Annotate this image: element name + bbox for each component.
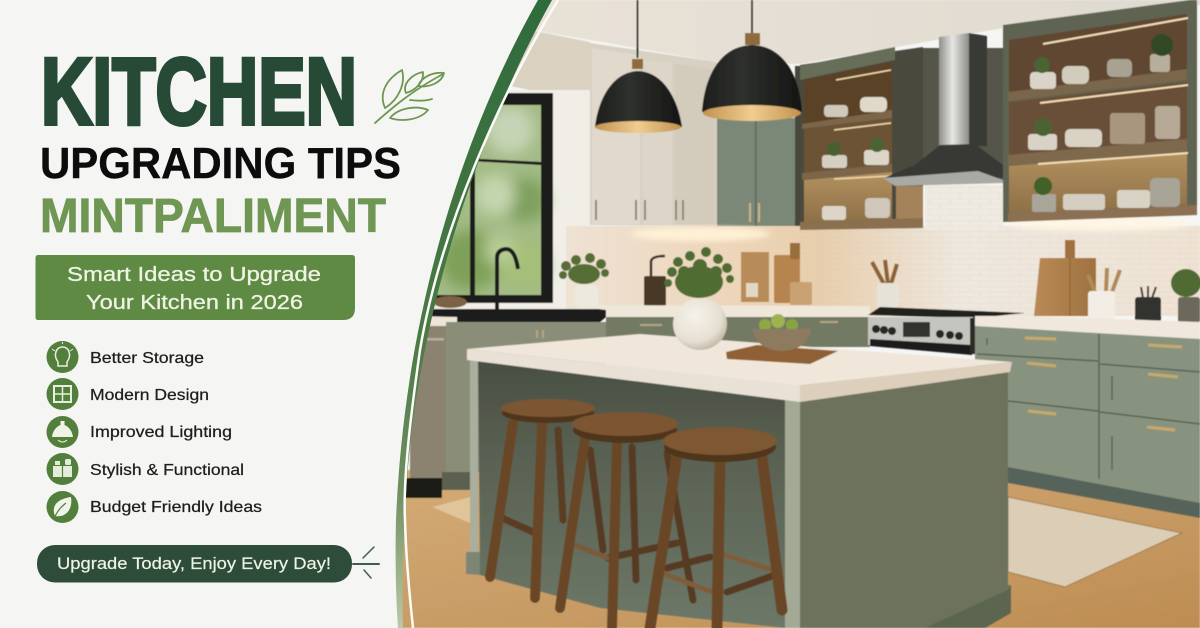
window glass foliage — [420, 100, 549, 300]
open shelves right — [1003, 0, 1197, 222]
green upper cabinets — [717, 66, 803, 229]
wooden boards and rack — [741, 243, 812, 305]
counter accessories — [559, 240, 1200, 323]
banner line 1: Smart Ideas to Upgrade — [67, 264, 321, 286]
kitchen photo scene — [400, 0, 1200, 628]
shelf objects — [1028, 34, 1180, 212]
fruit bowl — [753, 314, 811, 351]
icon: burst lines — [353, 547, 379, 578]
utensil crock — [872, 260, 899, 309]
curved white line — [405, 0, 558, 628]
plant foliage — [664, 247, 734, 298]
right countertop — [975, 316, 1200, 339]
item: modern design — [46, 378, 209, 410]
title: Kitchen: KITCHEN — [41, 39, 357, 145]
corner plant — [1171, 269, 1200, 323]
item: budget friendly ideas: Budget Friendly Ideas — [90, 499, 262, 516]
call to action pill — [37, 545, 352, 582]
tall cream cabinets — [590, 43, 717, 226]
curved green band — [396, 0, 552, 628]
lower cabinets left — [402, 317, 870, 498]
item: budget friendly ideas — [46, 491, 262, 523]
range hood — [883, 33, 1003, 186]
open shelves left — [800, 47, 923, 230]
window wall and reveal — [400, 90, 590, 315]
window — [420, 93, 553, 303]
island decor — [664, 247, 838, 364]
lower cabinets right — [975, 326, 1200, 518]
faucet and sink — [415, 249, 606, 327]
item: improved lighting — [46, 416, 232, 448]
wooden tray — [726, 345, 838, 364]
window frame — [430, 93, 553, 303]
feature list — [46, 341, 262, 523]
icon: leaf sprig — [375, 70, 444, 123]
upper wall — [430, 27, 590, 102]
banner line 2: Your Kitchen in 2026 — [86, 292, 303, 314]
ceiling — [510, 0, 1200, 64]
rug — [1008, 497, 1182, 587]
island base — [466, 358, 1011, 628]
item: improved lighting: Improved Lighting — [90, 424, 232, 441]
stools — [490, 399, 782, 628]
left panel with curved edge — [0, 0, 538, 628]
white vase — [673, 298, 727, 350]
stool 3 — [650, 427, 782, 628]
stove — [868, 307, 1025, 355]
cutting boards — [1034, 240, 1096, 316]
title: Mintpaliment: MINTPALIMENT — [40, 190, 386, 243]
black pot — [1135, 286, 1161, 322]
subtitle banner — [36, 255, 355, 320]
pendant lamp right — [702, 0, 802, 121]
backsplash — [566, 185, 1200, 316]
small rug — [432, 497, 470, 523]
dark holder — [644, 256, 666, 306]
title: Upgrading Tips: UPGRADING TIPS — [40, 139, 401, 188]
stool 2 — [560, 412, 678, 628]
item: modern design: Modern Design — [90, 387, 209, 404]
floor — [400, 470, 1200, 628]
island countertop — [467, 334, 1012, 402]
white crock with spoons — [1088, 268, 1120, 319]
item: better storage — [46, 341, 204, 373]
plant in white pot — [559, 253, 609, 309]
pendant lamp left — [595, 0, 682, 133]
item: stylish and functional — [46, 453, 244, 485]
stool 1 — [490, 399, 595, 598]
item: stylish and functional: Stylish & Functional — [90, 462, 244, 479]
back counter — [566, 305, 870, 320]
call to action pill: Upgrade Today, Enjoy Every Day! — [57, 554, 331, 573]
item: better storage: Better Storage — [90, 350, 204, 367]
